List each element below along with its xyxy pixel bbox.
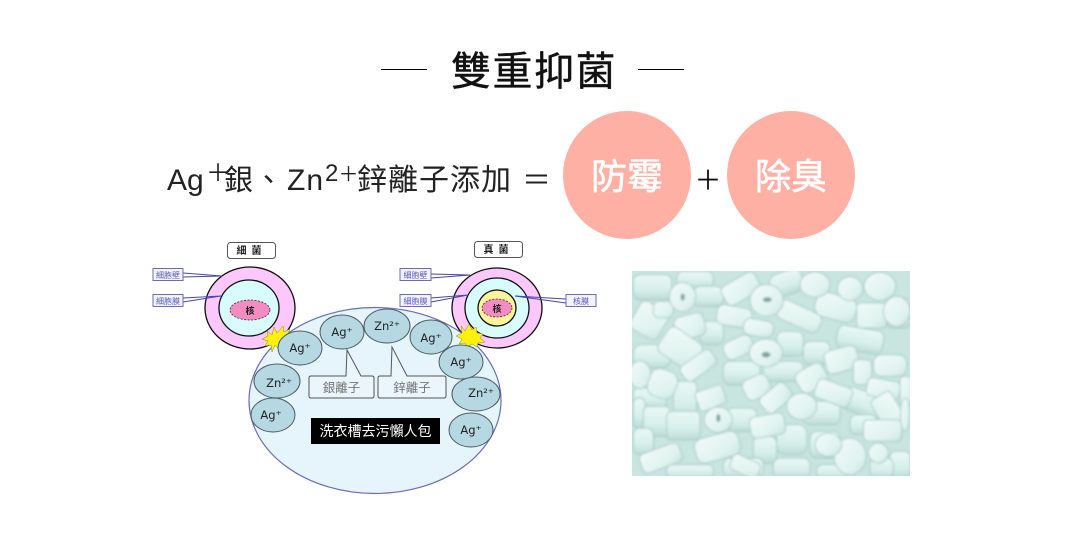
bacterium label <box>228 242 276 258</box>
structure tag: fungus cell membrane: 細胞膜 <box>404 296 428 307</box>
badge: 除臭: 除臭 <box>755 148 827 200</box>
formula text <box>167 153 551 199</box>
formula text: Ag <box>167 164 204 197</box>
zinc ion: Zn²⁺ <box>374 319 400 333</box>
structure tag: cell membrane: 細胞膜 <box>156 296 180 307</box>
plus sign: ＋ <box>694 159 722 198</box>
black label <box>311 418 440 444</box>
silver ion: Ag⁺ <box>331 325 353 339</box>
callout: silver ions <box>309 350 374 398</box>
callout lines <box>183 273 566 303</box>
starburst: left contact <box>262 326 290 352</box>
bacterium label: 細菌 <box>236 242 266 257</box>
silver ion: Ag⁺ <box>420 331 442 345</box>
formula text: ＝ <box>522 157 551 199</box>
silver ion: Ag⁺ <box>460 423 482 437</box>
silver ion: Ag⁺ <box>260 408 282 422</box>
silver ion <box>410 320 452 354</box>
washer bag ellipse <box>249 308 501 494</box>
photo: antibacterial pellets <box>628 266 912 480</box>
callout: zinc ions: 鋅離子 <box>393 377 431 396</box>
starburst: right contact <box>456 324 485 347</box>
silver ion: Ag⁺ <box>450 355 472 369</box>
badge: 防霉 <box>563 111 691 239</box>
formula text: ＋ <box>206 153 230 188</box>
bacterium cell <box>205 267 295 349</box>
formula text: Zn <box>287 164 324 197</box>
silver ion <box>251 398 295 432</box>
zinc ion: Zn²⁺ <box>468 386 494 400</box>
zinc ion <box>364 309 410 343</box>
structure tag: fungus cell membrane <box>400 294 431 307</box>
bacterium cell: 核 <box>245 304 255 317</box>
structure tag: nuclear membrane <box>566 294 596 307</box>
structure tag: nuclear membrane: 核膜 <box>573 296 589 307</box>
formula text: 2 <box>325 160 338 187</box>
title: 雙重抑菌 <box>451 39 617 97</box>
zinc ion <box>254 364 300 398</box>
silver ion <box>320 315 364 349</box>
fungus label: 真菌 <box>484 241 514 256</box>
formula text: 銀、 <box>224 157 284 199</box>
fungus cell <box>452 268 542 348</box>
formula text: ＋ <box>338 158 358 187</box>
black label: 洗衣槽去污懶人包 <box>320 421 432 441</box>
formula text: 鋅離子添加 <box>357 155 512 199</box>
structure tag: fungus cell wall <box>400 268 431 281</box>
zinc ion <box>452 377 500 411</box>
structure tag: fungus cell wall: 細胞壁 <box>404 270 428 281</box>
badge: 防霉: 防霉 <box>591 148 663 200</box>
pellet holes <box>681 293 772 422</box>
callout: silver ions: 銀離子 <box>323 377 360 396</box>
fungus label <box>474 241 522 258</box>
structure tag: cell wall: 細胞壁 <box>156 270 180 281</box>
diagram: antibacterial mechanism <box>153 241 596 494</box>
silver ion <box>278 331 322 365</box>
silver ion: Ag⁺ <box>289 341 311 355</box>
badge: 除臭 <box>727 111 855 239</box>
silver ion <box>439 345 483 379</box>
fungus cell: 核 <box>492 302 502 315</box>
zinc ion: Zn²⁺ <box>266 376 292 390</box>
callout: zinc ions <box>378 347 446 398</box>
silver ion <box>449 413 493 447</box>
